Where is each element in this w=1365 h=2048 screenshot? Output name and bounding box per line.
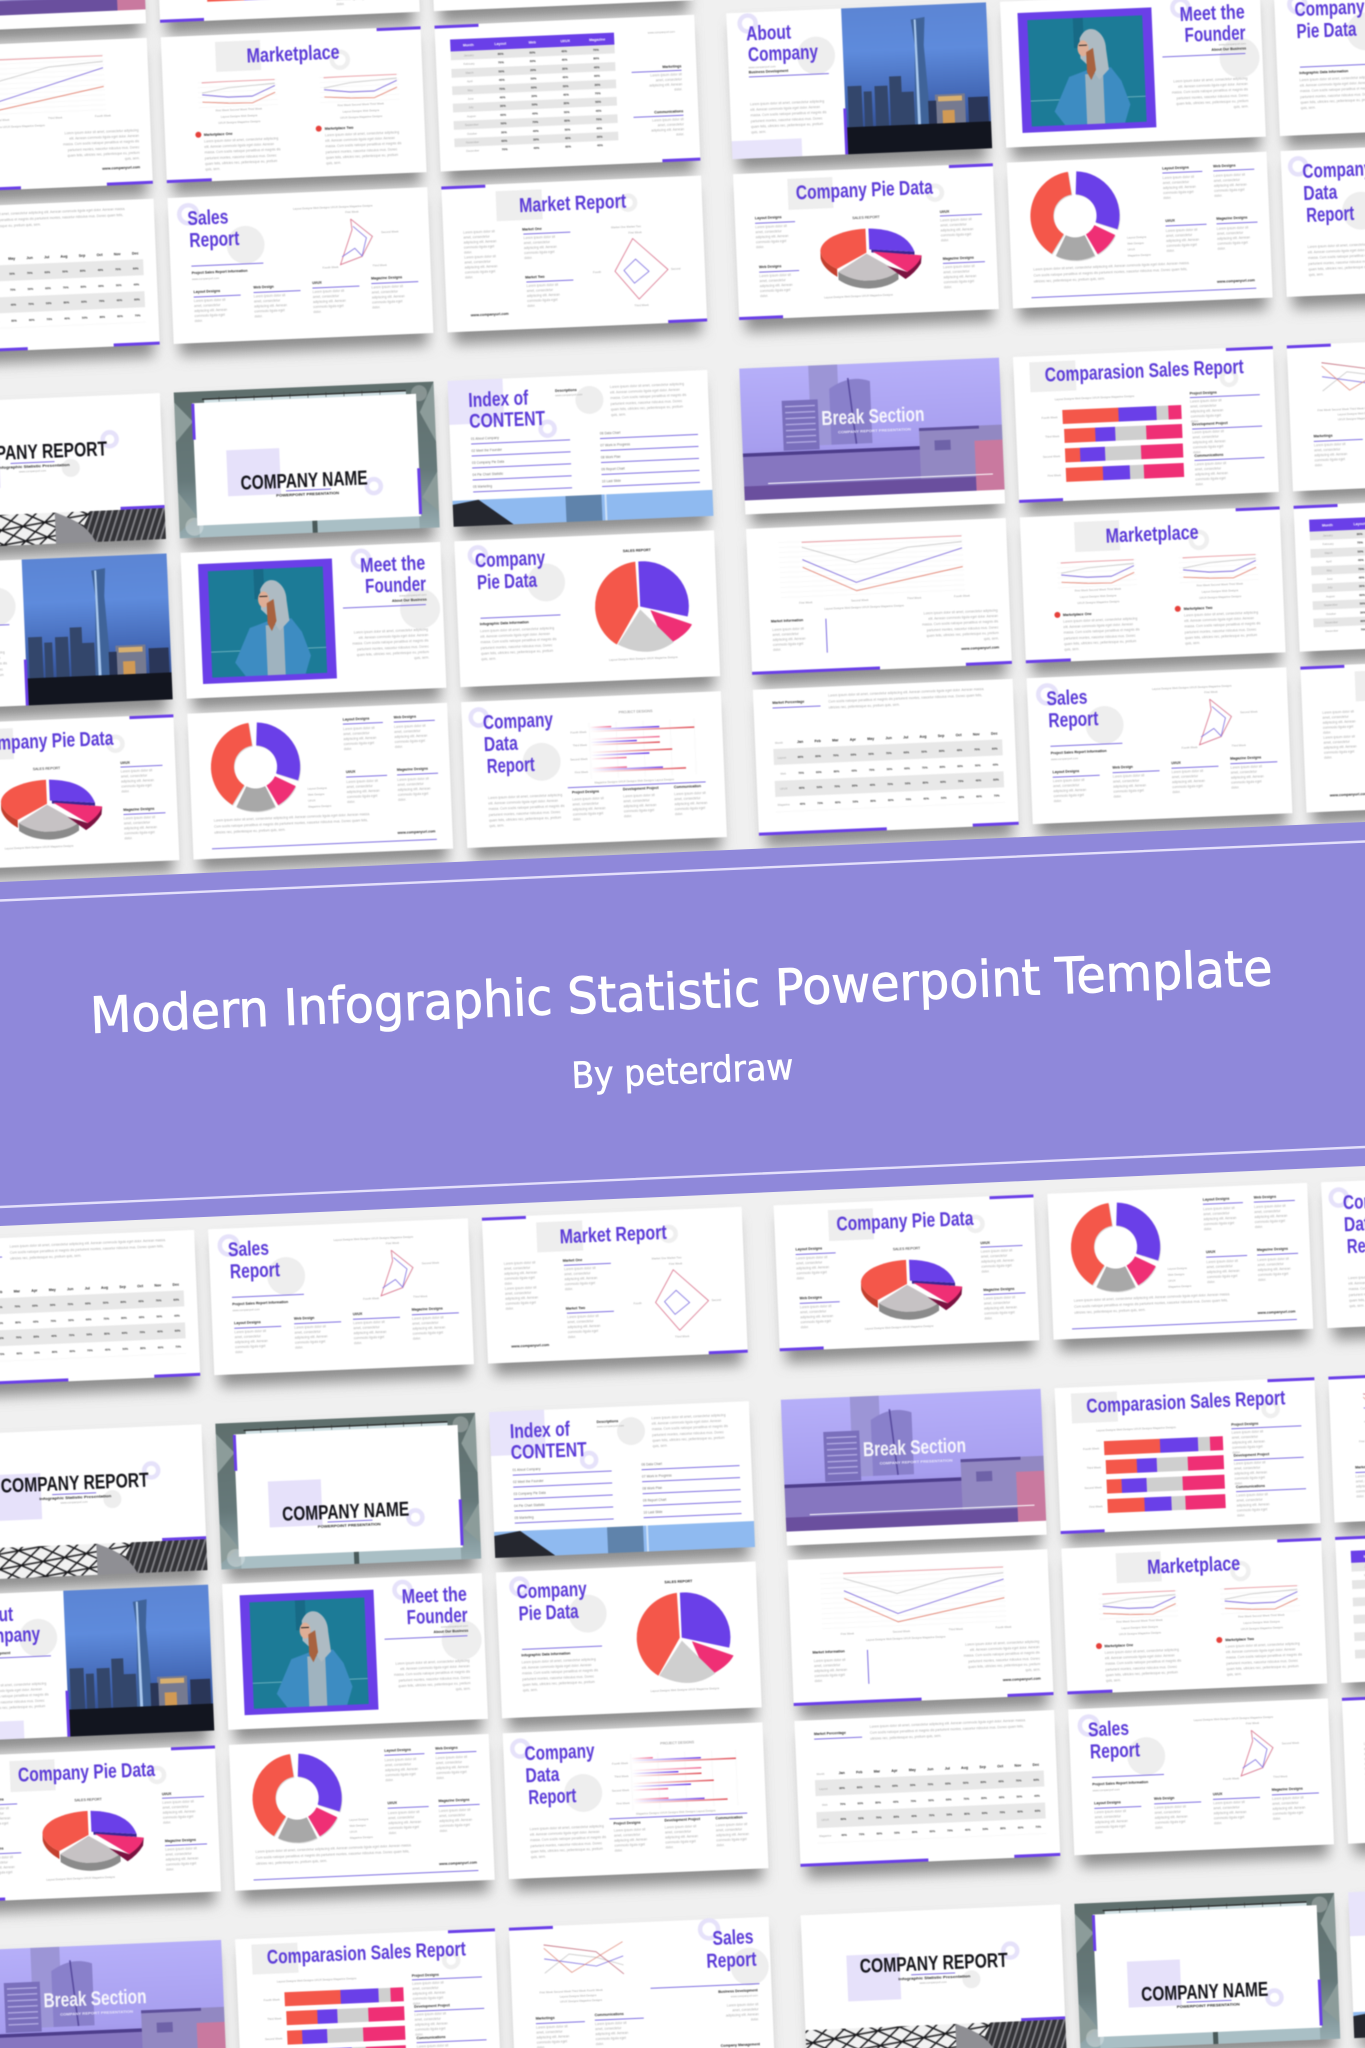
photo: purple tinted buildings: [739, 358, 1005, 500]
slide: market line chart: [0, 38, 153, 195]
pie chart: [593, 559, 693, 654]
slide: Sales Report radar: Layout Designs: [1052, 769, 1079, 774]
slide: donut chart: Magazine Designs: [308, 804, 332, 809]
contents list: [471, 427, 700, 492]
slide: Break Section bottom: [0, 1940, 227, 2048]
slide: market percentage table: Market Percentage: [772, 700, 804, 705]
slide: Company Pie Data 3D: Layout Designs Web Designs UI/UX Magazine Designs: [5, 844, 74, 851]
data table: Month: [1322, 523, 1333, 528]
byline: By peterdraw: [571, 1047, 794, 1097]
slide: Meet the Founder: Founder: [365, 574, 427, 598]
radar chart: Third Week: [1231, 743, 1247, 748]
contents list: 10 Last Slide: [602, 479, 621, 484]
slide: Company Pie Data flat: Infographic Data Information: [480, 620, 529, 626]
slide: Company Pie Data flat: [1274, 0, 1365, 136]
slide: Index of CONTENT: [447, 370, 713, 527]
data table: August: [1326, 594, 1335, 598]
slide: Index of CONTENT: Descriptions: [555, 388, 577, 393]
radar chart: Second Week: [1240, 710, 1258, 714]
heading: Company Data Report: Company: [483, 709, 554, 734]
heading: Marketplace: Marketplace: [1105, 522, 1199, 548]
slide: Break Section lower: [781, 1389, 1047, 1546]
slide: Marketplace lower: [1061, 1538, 1327, 1694]
slide: COMPANY REPORT bottom: [801, 1904, 1067, 2048]
slide: donut chart: www.companyurl.com: [396, 829, 436, 835]
slide: Sales Report radar: Project Sales Report Information: [1051, 749, 1107, 755]
percentage table: Jan Feb Mar Apr May Jun Jul Aug Sep Oct Nov Dec: [797, 732, 998, 744]
slide: Market Report radar lower: [1342, 1687, 1365, 1844]
slide: Company Data Report (below band): [1321, 1171, 1365, 1328]
slide: Sales Report radar: [168, 187, 433, 344]
slide: Comparasion Sales Report: Communications: [1194, 453, 1224, 458]
heading: Comparasion Sales Report: Comparasion Sales Report: [1044, 356, 1244, 387]
slide: COMPANY REPORT lower: [0, 1424, 207, 1581]
slide: line chart Sales Report bottom: [509, 1917, 775, 2048]
percentage table: 70% 60% 80% 40% 70% 50% 60% 70% 80% 60% 50% 40%: [798, 763, 999, 775]
stacked bar chart: First Week: [1048, 473, 1062, 478]
3D pie chart: [0, 777, 103, 842]
slide: Company Pie Data flat: [454, 530, 720, 687]
radar chart: [1179, 688, 1260, 750]
slide: donut chart: Web Designs: [394, 715, 416, 720]
slide: Comparasion Sales Report: [1013, 346, 1279, 503]
slide: monthly table: [1294, 495, 1365, 652]
slide: Percentage table (below band): [0, 1230, 200, 1387]
stacked bar chart: Second Week: [1043, 454, 1061, 459]
slide: Comparasion Sales Report: Project Designs: [1190, 390, 1217, 396]
slide: Break Section: [739, 358, 1005, 514]
slide: About Company lower: [0, 1585, 214, 1741]
slide: Sales Report radar: Web Design: [1112, 765, 1133, 770]
percentage table: [773, 731, 1005, 812]
slide: donut chart (below band): [1047, 1183, 1313, 1340]
stacked bar chart: Fourth Week: [1042, 415, 1058, 420]
slide: Sales Report radar: Report: [1048, 708, 1099, 732]
slide: Index of CONTENT: CONTENT: [469, 408, 546, 433]
slide: Comparasion Sales Report: Development Project: [1192, 421, 1229, 427]
slide: line chart Sales Report lower: [1328, 1366, 1365, 1523]
slide: line chart Sales Report: Marketings: [1314, 434, 1333, 438]
slide: Break Section: COMPANY REPORT PRESENTATION: [838, 427, 911, 434]
contents list: 03 Company Pie Data: [472, 460, 504, 465]
slide: Sales Report radar lower: [1068, 1698, 1334, 1855]
slide: Company Pie Data 3D (below band): [774, 1194, 1040, 1351]
heading: COMPANY NAME: COMPANY NAME: [240, 467, 368, 495]
slide: Company Data Report: [1281, 140, 1365, 297]
slide: Marketplace: Marketplace One: [1063, 612, 1092, 617]
slide: Marketplace: [1020, 506, 1286, 663]
data table: January: [1323, 533, 1333, 538]
slide: donut chart: [1007, 152, 1273, 309]
contents list: 08 Work Plan: [601, 455, 621, 460]
slide: Company Pie Data 3D lower: [0, 1745, 221, 1902]
slide: market percentage table: [753, 679, 1019, 836]
slide: Company Data Report lower: [503, 1722, 769, 1879]
slide: line chart Sales Report (top row): [428, 0, 694, 11]
slide: percentage table lower: [794, 1710, 1060, 1867]
slide: Sales Report radar: Magazine Designs: [1230, 755, 1261, 761]
data table: May: [1327, 568, 1333, 572]
photo: city skyline at dusk: [20, 553, 173, 706]
slide: donut chart: Web Designs: [308, 792, 325, 797]
slide: Company Pie Data 3D: Magazine Designs: [123, 807, 155, 812]
stacked bar chart: [1041, 405, 1184, 483]
horizontal bar chart: [569, 718, 696, 780]
data table: June: [1327, 577, 1333, 581]
slide: Company Pie Data flat: Pie Data: [477, 570, 538, 594]
line chart: Second Week: [851, 598, 869, 603]
slide: Company Pie Data flat lower: [496, 1561, 762, 1718]
radar chart: First Week: [1204, 690, 1218, 694]
percentage table: 90% 80% 70% 60% 50% 70% 60% 50% 80% 40% 70% 60%: [798, 747, 998, 759]
slide: Sales Report radar: UI/UX: [1171, 761, 1182, 765]
data table: March: [1325, 551, 1333, 555]
slide: Comparasion Sales Report lower: [1055, 1377, 1320, 1534]
slide: Company Pie Data flat: SALES REPORT: [623, 548, 652, 553]
percentage table: Month: [775, 741, 783, 745]
contents list: 06 Data Chart: [600, 431, 621, 436]
photo: woman in hooded denim jacket: [208, 566, 327, 678]
data table: April: [1326, 559, 1332, 564]
radar chart: Fourth Week: [1182, 745, 1198, 750]
heading: Meet the Founder: Meet the: [360, 553, 426, 577]
slide: donut chart: Layout Designs: [307, 786, 328, 791]
photo strip: lattice roof: [0, 508, 166, 550]
title: Modern Infographic Statistic Powerpoint Template: [89, 939, 1274, 1045]
slide: Company Data Report: Report: [486, 754, 535, 778]
stacked bar chart: Third Week: [1045, 434, 1060, 439]
heading: Sales Report: Sales: [1046, 687, 1088, 710]
slide: COMPANY NAME cover: [174, 382, 440, 538]
slide: donut chart: Layout Designs: [343, 717, 370, 722]
line chart: [1315, 359, 1365, 422]
percentage table: 60% 50% 70% 80% 40% 70% 50% 80% 60% 70% 40% 60%: [799, 778, 999, 790]
data table: October: [1326, 611, 1336, 616]
slide: About Company: [726, 2, 992, 159]
horizontal bar chart: Fourth Week: [570, 730, 587, 735]
slide: donut chart: [187, 703, 453, 860]
slide: Comparasion Sales Report bottom: [235, 1928, 501, 2048]
contents list: 09 Report Chart: [601, 467, 625, 472]
percentage table: Web: [780, 771, 787, 776]
line chart: First Week: [799, 600, 813, 605]
slide: Sales Report radar: www.companyurl.com: [1051, 756, 1079, 761]
slide: Sales Report radar (below band): [208, 1218, 474, 1375]
slide: Comparasion Sales Report (top row): [154, 0, 420, 23]
slide: Meet the Founder: [1000, 0, 1266, 148]
data table: [1309, 513, 1365, 634]
slide: Company Pie Data flat: Layout Designs Web Designs UI/UX Magazine Designs: [609, 655, 678, 662]
contents list: 01 About Company: [471, 436, 499, 441]
horizontal bar chart: First Week: [575, 770, 589, 774]
slide: About Company: [0, 553, 173, 710]
donut chart: [221, 733, 291, 802]
slide: market line chart lower: [788, 1549, 1054, 1706]
slide: Company Pie Data 3D: UI/UX: [120, 761, 131, 765]
contents list: 07 Work in Progress: [600, 442, 631, 448]
slide: Company Pie Data 3D: [733, 163, 999, 320]
slide: donut chart: UI/UX: [308, 798, 316, 803]
slide: COMPANY NAME cover: POWERPOINT PRESENTATION: [276, 491, 340, 498]
data table: November: [1325, 620, 1338, 625]
slide: Company Data Report: Magazine Designs UI/UX Designs Web Designs Layout Designs: [594, 777, 675, 785]
horizontal bar chart: Second Week: [570, 757, 588, 762]
slide: Sales Report radar: Layout Designs Web Designs UI/UX Designs Magazine Designs: [1152, 684, 1232, 691]
slide: Meet the Founder: [181, 542, 446, 699]
data table: February: [1322, 542, 1334, 546]
slide: Company Data Report: Development Project: [623, 786, 659, 791]
slide: Index of CONTENT lower: [489, 1401, 755, 1558]
slide: Company Data Report: [461, 691, 727, 848]
slide: Company Data Report: Data: [483, 733, 519, 756]
line chart: [797, 535, 971, 612]
heading: Company Pie Data: Company: [475, 547, 546, 572]
slide: market percentage table: [0, 199, 160, 356]
slide: Marketplace: [161, 26, 427, 183]
slide: Meet the Founder: About Our Business: [392, 598, 427, 603]
data table: September: [1324, 603, 1338, 607]
percentage table: Magazine: [778, 802, 790, 807]
slide: Market Report radar (below band): [482, 1207, 748, 1364]
percentage table: Layout: [778, 755, 786, 760]
slide: market line chart: Market Information: [771, 618, 803, 624]
line chart one: [1057, 560, 1137, 606]
slide: line chart Sales Report: [1287, 334, 1365, 491]
slide: Meet the Founder lower: [222, 1573, 488, 1730]
heading: Index of CONTENT: Index of: [468, 388, 529, 412]
heading: Break Section: Break Section: [821, 404, 925, 430]
slide: COMPANY REPORT cover: www.companyurl.com: [19, 468, 47, 474]
slide: market line chart: www.companyurl.com: [960, 645, 999, 651]
data table: Layout: [1353, 522, 1365, 526]
slide: COMPANY NAME lower: [215, 1413, 481, 1570]
slide: Company Data Report: Communication: [674, 784, 701, 789]
slide: Index of CONTENT: www.companyurl.com: [555, 392, 583, 397]
slide: Break Section (top row): [0, 0, 146, 34]
slide: Comparasion Sales Report: Layout Designs Web Designs UI/UX Designs Magazine Designs: [1055, 394, 1135, 401]
horizontal bar chart: Third Week: [573, 743, 588, 747]
slide: Index of CONTENT bottom: [1348, 1881, 1365, 2038]
slide: Sales Report radar: [1027, 667, 1292, 824]
data table: July: [1327, 585, 1333, 590]
slide: donut chart lower: [229, 1734, 495, 1891]
photo strip: sky and building: [453, 490, 713, 527]
line chart: Fourth Week: [954, 594, 971, 598]
contents list: 05 Marketing: [473, 484, 492, 489]
slide: COMPANY REPORT cover: [0, 393, 166, 550]
slide: Company Data Report: Project Designs: [572, 789, 599, 795]
contents list: 04 Pie Chart Statistic: [472, 472, 504, 477]
slide: Company Pie Data 3D: SALES REPORT: [33, 766, 61, 771]
data table: December: [1325, 629, 1338, 633]
slide: market line chart: [746, 518, 1012, 675]
line chart: Layout Designs Web Designs UI/UX Designs Magazine Designs: [824, 603, 905, 611]
slide: Meet the Founder: www.companyurl.com: [399, 592, 427, 598]
percentage table: UI/UX: [780, 786, 788, 791]
slide: Company Data Report: PROJECT DESIGNS: [619, 709, 653, 715]
slide: COMPANY NAME bottom: [1074, 1893, 1340, 2048]
slide: donut chart: UI/UX: [346, 770, 356, 774]
percentage table: 40% 70% 60% 50% 80% 60% 70% 40% 50% 80% 60% 70%: [800, 793, 1000, 806]
line chart: Third Week: [907, 596, 922, 600]
slide: Market Report radar: [1300, 656, 1365, 813]
slide: Company Pie Data 3D: [0, 714, 179, 871]
slide: Marketplace: Marketplace Two: [1184, 606, 1213, 611]
line chart two: [1179, 554, 1259, 601]
slide: monthly table: [434, 15, 700, 172]
slide: Market Report radar: [441, 176, 707, 332]
title band: [0, 822, 1365, 1226]
contents list: 02 Meet the Founder: [471, 448, 503, 453]
slide: monthly table lower: [1335, 1526, 1365, 1683]
slide: donut chart: Magazine Designs: [397, 767, 428, 772]
